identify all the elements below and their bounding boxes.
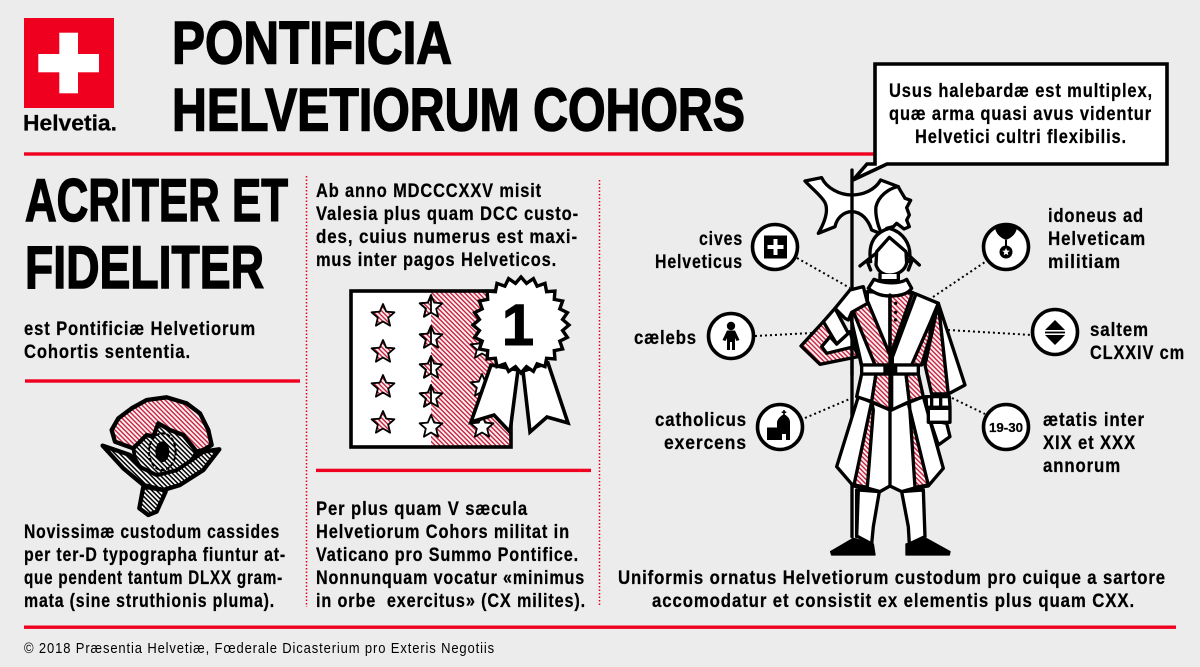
heading: motto [25, 167, 288, 301]
icon: age badge [984, 404, 1028, 450]
text: Valais recruits: Ab anno MDCCCXXV misit [316, 181, 542, 202]
label: fit for service: Helveticam [1048, 229, 1146, 250]
label: age: annorum [1043, 456, 1121, 477]
title: HELVETIORUM COHORS [172, 76, 745, 144]
text: helmets: mata (sine struthionis pluma). [24, 591, 275, 612]
text: five centuries: Vaticano pro Summo Pontifice. [316, 545, 579, 566]
icon: medal [984, 224, 1028, 270]
label: unmarried: cælebs [634, 328, 697, 349]
text: five centuries: Helvetiorum Cohors militat in [316, 522, 570, 543]
label: citizen [655, 229, 743, 273]
text: Valais recruits: des, cuius numerus est maxi- [316, 227, 578, 248]
label: practising Catholic [655, 410, 747, 454]
icon: Valais flag with rosette [351, 277, 569, 447]
text: five centuries: Nonnunquam vocatur «minimus [316, 568, 585, 589]
label: height: CLXXIV cm [1090, 343, 1185, 364]
text: uniform caption: accomodatur et consistit ex elementis plus quam CXX. [652, 591, 1135, 612]
icon: church [758, 404, 802, 450]
skirt and legs [831, 364, 950, 555]
heading: motto: ACRITER ET [25, 167, 288, 234]
label: height: saltem [1090, 320, 1149, 341]
speech bubble [853, 64, 1167, 180]
icon: Valais flag with rosette: 1 [502, 293, 534, 358]
text: uniform caption [618, 568, 1166, 612]
speech bubble: Helvetici cultri flexibilis. [915, 127, 1127, 148]
text: Valais recruits: mus inter pagos Helveticos. [316, 250, 557, 271]
speech bubble: quæ arma quasi avus videntur [889, 104, 1152, 125]
label: fit for service: militiam [1048, 252, 1121, 273]
label: fit for service [1048, 206, 1146, 273]
label: height [1090, 320, 1185, 364]
label: citizen: cives [699, 229, 743, 250]
speech bubble: Usus halebardæ est multiplex, [889, 81, 1153, 102]
arm [801, 287, 868, 375]
label: age: ætatis inter [1043, 410, 1145, 431]
text: Valais recruits: Valesia plus quam DCC custo- [316, 204, 579, 225]
text: motto subtitle [24, 319, 256, 363]
icon: unmarried person [708, 314, 754, 358]
icon: age badge: 19-30 [989, 420, 1023, 435]
text: five centuries [316, 499, 586, 612]
label: citizen: Helveticus [655, 252, 743, 273]
icon: helmet [103, 397, 219, 515]
label: practising Catholic: catholicus [655, 410, 747, 431]
logo: Helvetia: Helvetia. [23, 110, 117, 136]
title [172, 10, 745, 144]
head and helmet [860, 228, 919, 281]
text: motto subtitle: Cohortis sententia. [24, 342, 191, 363]
halberd [805, 170, 898, 537]
text: helmets: que pendent tantum DLXX gram- [24, 568, 283, 589]
label: fit for service: idoneus ad [1048, 206, 1144, 227]
heading: motto: FIDELITER [25, 234, 264, 301]
text: five centuries: in orbe exercitus» (CX milites). [316, 591, 586, 612]
torso [850, 279, 965, 394]
icon: height arrows [1032, 310, 1078, 354]
label: practising Catholic: exercens [664, 433, 747, 454]
text: five centuries: Per plus quam V sæcula [316, 499, 528, 520]
text: helmets: per ter-D typographa fiuntur at- [24, 545, 286, 566]
text: helmets: Novissimæ custodum cassides [24, 522, 280, 543]
text: helmets [24, 522, 286, 612]
text: Valais recruits [316, 181, 579, 271]
label: age [1043, 410, 1145, 477]
logo: Helvetia [23, 18, 117, 136]
title: PONTIFICIA [172, 10, 452, 76]
footer credit: © 2018 Præsentia Helvetiæ, Fœderale Dicasterium pro Exteris Negotiis [24, 640, 495, 657]
icon: Swiss citizen [752, 224, 798, 270]
figure: Swiss guard with halberd [801, 170, 965, 555]
text: motto subtitle: est Pontificiæ Helvetiorum [24, 319, 256, 340]
label: age: XIX et XXX [1043, 433, 1136, 454]
plume [876, 187, 911, 234]
